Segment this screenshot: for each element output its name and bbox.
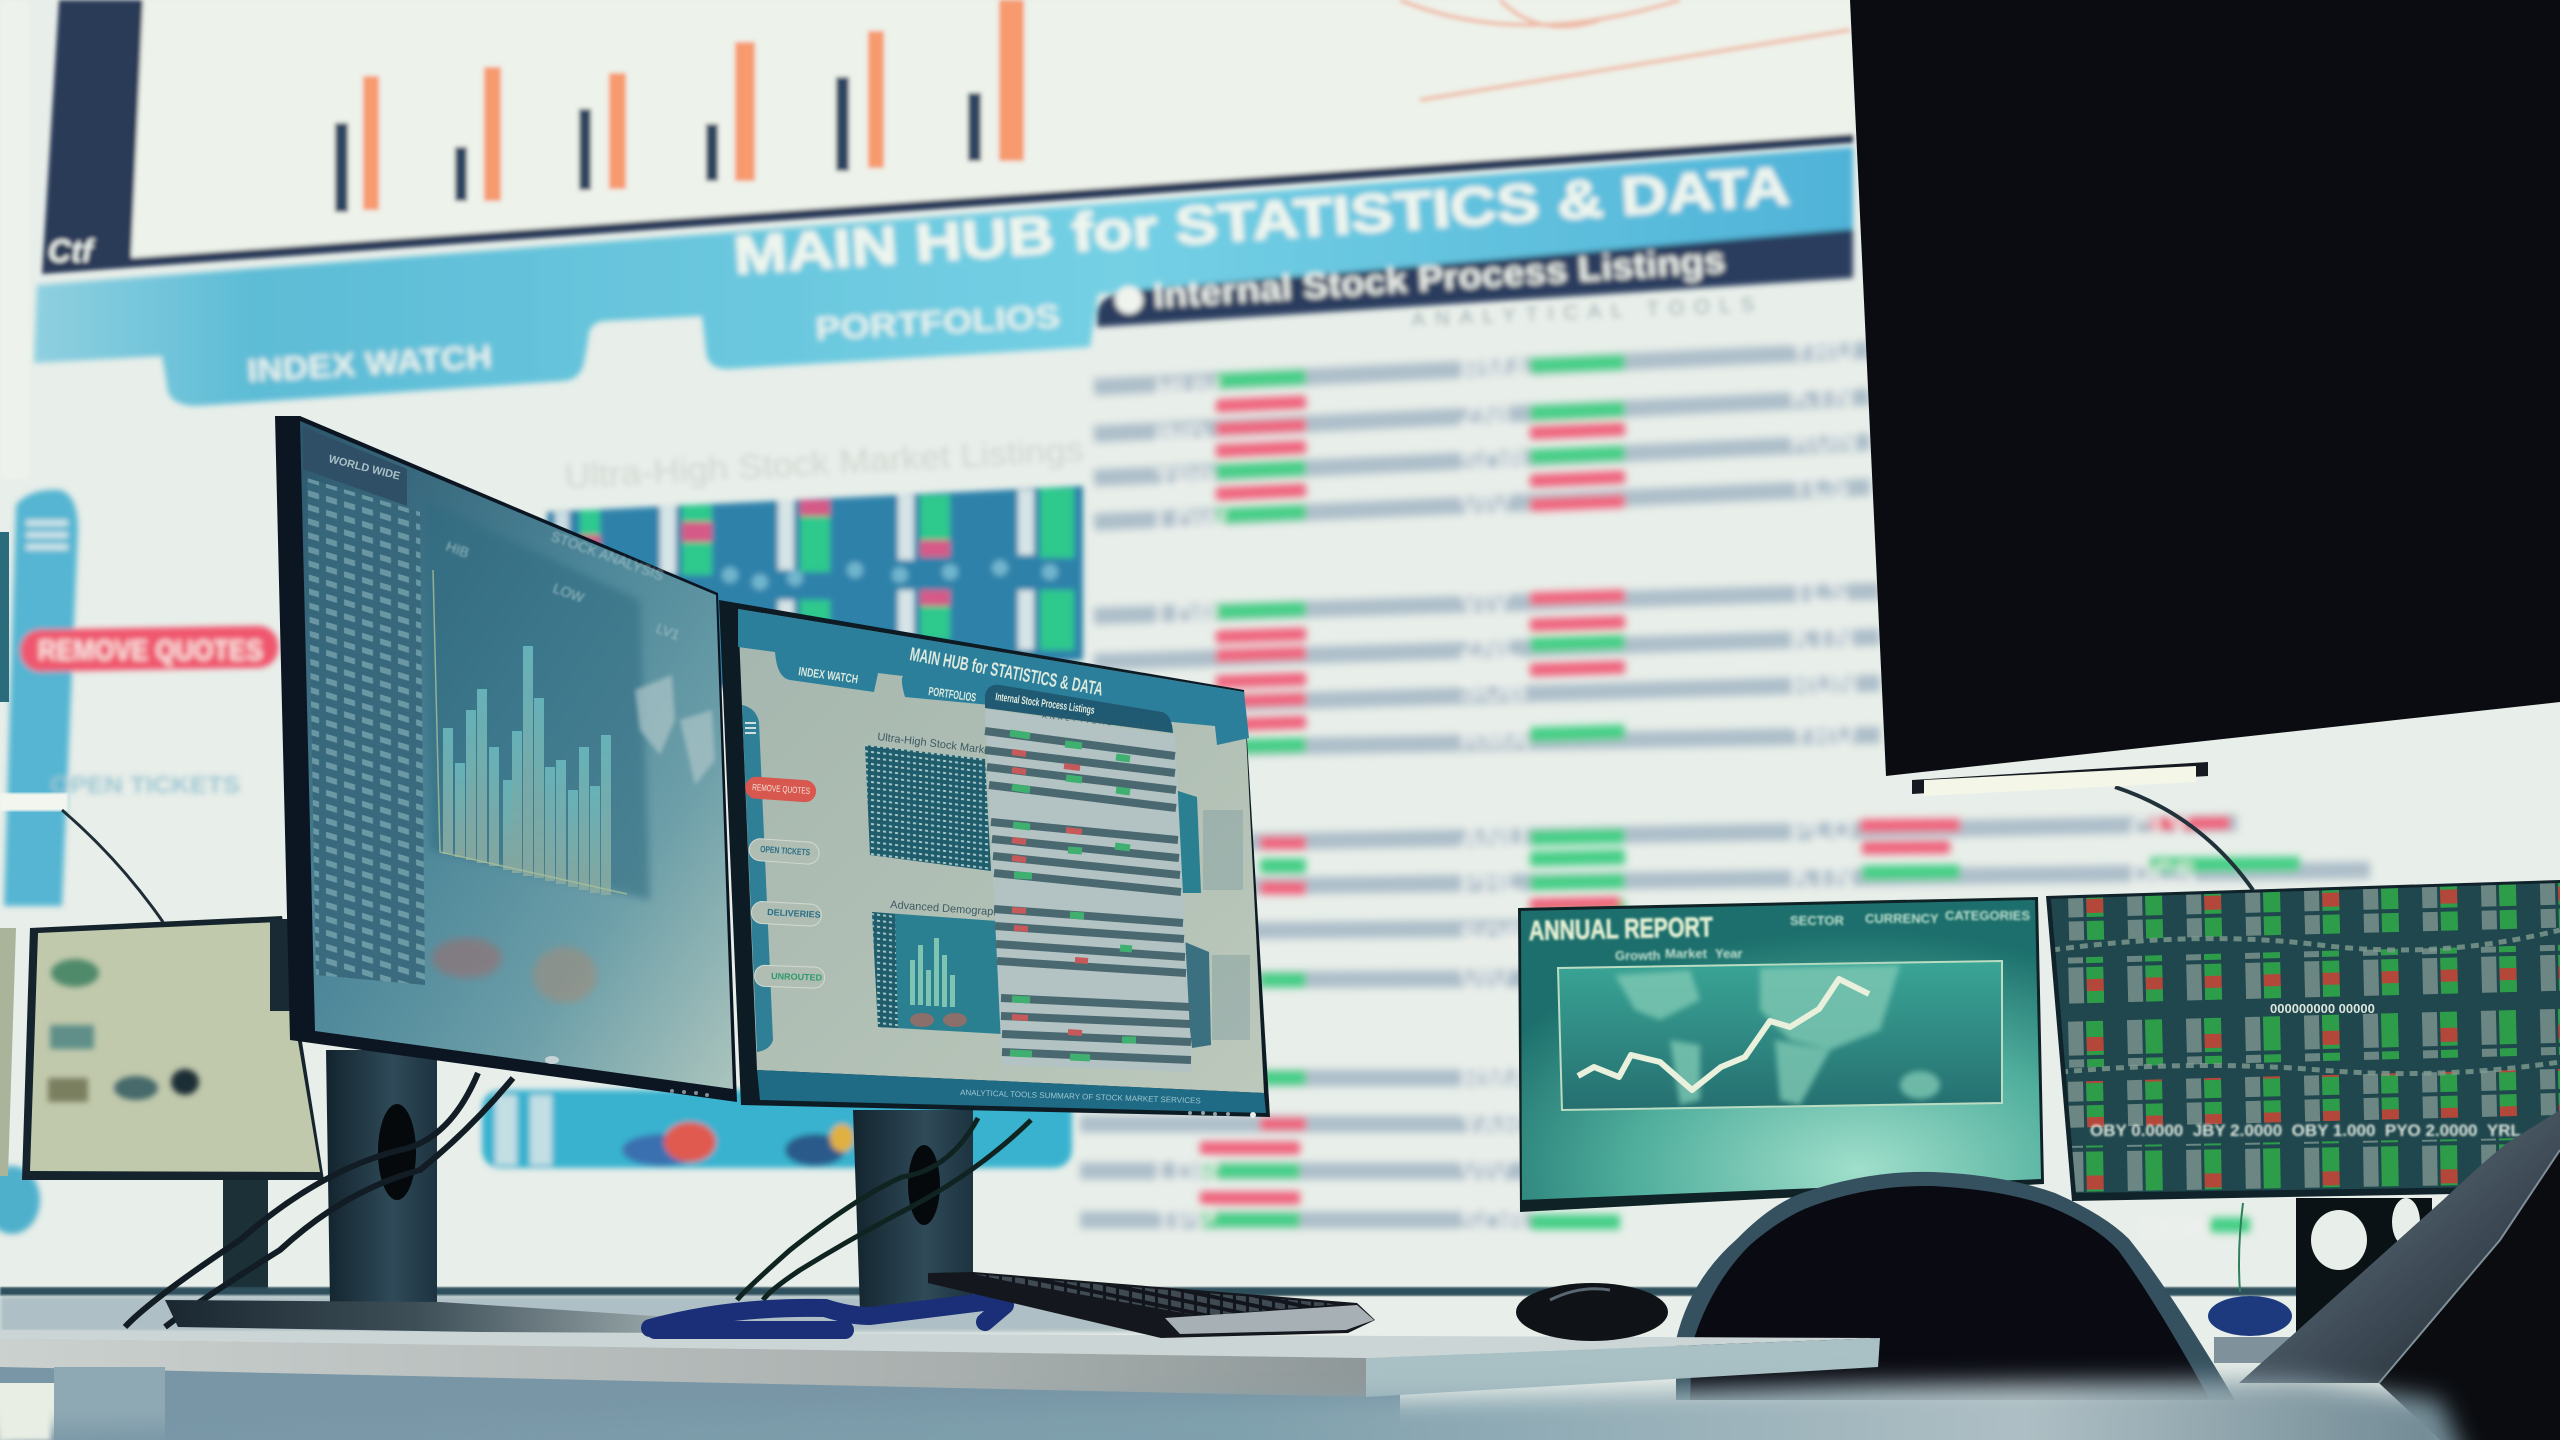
stock grid monitor — [2040, 875, 2560, 1205]
lower tint charts — [432, 938, 597, 1003]
desk leg — [54, 1367, 165, 1440]
analytical tools caption: ANALYTICAL TOOLS — [1411, 294, 1765, 331]
data tabs: HIB — [444, 538, 471, 561]
table header — [303, 427, 407, 506]
ticker labels: LDR — [1155, 598, 1219, 633]
cable bundle — [2208, 1203, 2292, 1336]
demographic caption: Advanced Demographic Info — [890, 899, 1029, 921]
left edge strip — [0, 0, 30, 480]
ticker labels: VIV — [1460, 964, 1510, 999]
arm light edge — [2379, 1150, 2560, 1383]
far edge monitor — [0, 928, 16, 1176]
cables — [125, 1073, 513, 1327]
left edge dark monitor sliver — [0, 532, 9, 702]
header band — [738, 609, 1249, 745]
ticker labels: TPP — [1155, 1202, 1215, 1237]
open tickets label: OPEN TICKETS — [50, 772, 240, 799]
index watch tab label: INDEX WATCH — [798, 664, 859, 686]
heatmap base — [547, 486, 1083, 700]
grey table rows — [1080, 350, 2370, 1220]
large black monitor foreground — [1850, 0, 2560, 796]
lower analytics panel — [482, 1090, 1072, 1168]
repeat white block bottom left — [0, 1395, 50, 1440]
chart frame — [1558, 961, 2002, 1110]
world map — [1615, 965, 1940, 1105]
ticker labels: RMA — [1460, 1060, 1531, 1095]
chair inner — [1690, 1186, 2210, 1400]
ticker labels: ZNL — [1460, 398, 1520, 433]
annual report monitor — [1518, 897, 2044, 1212]
ticker labels: IND — [1155, 418, 1208, 453]
data tabs: LV1 — [654, 620, 682, 643]
lower left pill — [0, 1166, 40, 1234]
ticker labels — [1155, 332, 2208, 1245]
red cells — [1200, 402, 2230, 1198]
chart axis — [433, 570, 627, 894]
stand base — [165, 1300, 670, 1335]
world map fragment — [635, 675, 715, 785]
listing red cells — [1012, 752, 1088, 1033]
ticker labels: RMA — [1460, 352, 1531, 387]
right main monitor — [719, 600, 1270, 1118]
chair shell — [1676, 1172, 2235, 1400]
title: ANNUAL REPORT — [1528, 911, 1713, 946]
remove quotes label: REMOVE QUOTES — [38, 635, 263, 667]
monitor screen — [30, 922, 320, 1172]
menu icon — [745, 722, 756, 734]
deliveries button — [751, 901, 822, 927]
top nav labels: SECTOR — [1790, 913, 1845, 928]
control buttons — [670, 1089, 709, 1097]
ticker labels: TLS — [1790, 574, 1849, 609]
wall screen: chart area — [42, 0, 1853, 274]
open tickets button — [748, 838, 820, 865]
mouse highlight — [1550, 1289, 1610, 1300]
office chair back — [1676, 1172, 2235, 1400]
cables — [737, 1118, 1031, 1300]
ticker labels: VIV — [1460, 488, 1510, 523]
keyboard body — [928, 1272, 1375, 1338]
ticker labels: RMA — [1460, 720, 1531, 755]
lower analytics text columns — [495, 1095, 552, 1165]
trend line — [1578, 979, 1869, 1090]
demographic number column — [872, 912, 898, 1028]
screen chart blobs — [48, 959, 199, 1102]
side bracket — [270, 919, 290, 1011]
ticker labels: SOB — [1460, 672, 1527, 707]
chart dark area — [425, 500, 650, 900]
top nav labels — [1615, 908, 2030, 963]
open tickets button: OPEN TICKETS — [760, 844, 810, 857]
desk surface — [0, 1330, 1880, 1358]
listing green cells — [1010, 733, 1136, 1058]
ticker strip: middle: 000000000 00000 — [2270, 1001, 2375, 1016]
webcam mark — [545, 1056, 559, 1064]
keys — [973, 1274, 1340, 1316]
chart panel background — [131, 0, 1853, 262]
listings dot — [1115, 286, 1143, 314]
remove quotes button — [744, 776, 817, 803]
ticker labels: KTN — [1790, 378, 1854, 413]
dark rear mass — [2379, 1150, 2560, 1440]
ultra-high caption: Ultra-High Stock Market Listings — [877, 731, 1035, 762]
banner title: MAIN HUB for STATISTICS & DATA — [732, 156, 1791, 286]
top nav labels: Market — [1665, 946, 1708, 961]
table column — [307, 478, 425, 985]
wave separators — [2052, 930, 2560, 1074]
listings card title: Internal Stock Process Listings — [995, 691, 1095, 717]
ticker labels: HUV — [1155, 371, 1221, 406]
data tabs — [444, 528, 682, 643]
heatmap node trail — [722, 560, 1058, 590]
wall panel: stock heatmap — [482, 431, 1085, 1168]
back shelf — [0, 1287, 2560, 1296]
ticker labels: YRU — [1790, 716, 1855, 751]
stand column — [326, 1050, 437, 1304]
heatmap columns — [555, 488, 1074, 650]
ticker labels: SOB — [1460, 918, 1527, 953]
screen — [1521, 900, 2041, 1200]
demographic bars — [910, 938, 955, 1007]
bezel — [719, 600, 1270, 1117]
silver front edge — [1165, 1305, 1374, 1334]
top nav labels: CATEGORIES — [1945, 908, 2030, 923]
ticker strip: lower: OBY 0.0000 JBY 2.0000 OBY 1.000 PYO 2.0000 YRL — [2090, 1121, 2521, 1140]
blue banner shape — [34, 147, 1853, 406]
monitor bezel — [22, 916, 324, 1180]
under desk fill — [0, 1360, 1400, 1440]
green cells — [1200, 362, 2300, 1225]
ultra-high panel — [865, 745, 991, 871]
arm band — [2239, 1110, 2560, 1383]
ticker labels: ANU — [1460, 820, 1527, 855]
data tabs: STOCK ANALYSIS — [549, 528, 666, 583]
bezel — [275, 416, 737, 1102]
desk left face — [0, 1338, 1366, 1397]
back desk band — [0, 1296, 1200, 1332]
ticker labels: YAR — [1460, 1106, 1523, 1141]
demographic panel — [872, 912, 1002, 1034]
curve traces top right — [1400, 0, 1850, 100]
cable hole — [908, 1145, 940, 1225]
ticker labels: YRU — [1790, 332, 1855, 367]
listings header — [1097, 229, 1853, 327]
back desk right — [2214, 1337, 2560, 1363]
bezel — [1518, 897, 2044, 1212]
right side panel upper — [1175, 790, 1201, 893]
lamp bar — [0, 793, 68, 811]
deliveries button: DELIVERIES — [767, 907, 821, 920]
ticker labels: CLY — [2130, 810, 2189, 845]
ticker labels: SOB — [1460, 1204, 1527, 1239]
ticker labels: PLO — [1790, 812, 1854, 847]
blurred foreground desk — [0, 1380, 2470, 1440]
logo mark: Ctf — [48, 233, 96, 269]
wall banner — [34, 147, 1853, 406]
ticker labels: RUN — [1790, 666, 1857, 701]
ticker labels: LDW — [1155, 504, 1226, 539]
right side panel lower — [1180, 940, 1211, 1048]
navy side band — [42, 0, 1853, 274]
footer caption: ANALYTICAL TOOLS SUMMARY OF STOCK MARKET SERVICES — [960, 1088, 1201, 1105]
lamp fixture — [1912, 762, 2208, 794]
monitor stand — [223, 1180, 268, 1292]
sidebar — [742, 705, 773, 1052]
heatmap caption: Ultra-High Stock Market Listings — [563, 431, 1085, 496]
menu icon — [26, 520, 68, 550]
mouse body — [1516, 1283, 1668, 1341]
wall listings table — [1080, 332, 2370, 1245]
ticker labels: ZNL — [1460, 630, 1520, 665]
footer band — [757, 1070, 1266, 1113]
ticker labels: KTN — [1790, 620, 1854, 655]
tab: portfolios: PORTFOLIOS — [814, 297, 1061, 347]
listings heading: Internal Stock Process Listings — [1152, 239, 1726, 316]
stand column — [853, 1110, 973, 1310]
ticker labels: SEW — [2137, 1210, 2208, 1245]
computer mouse — [1516, 1283, 1668, 1341]
ticker labels: LDR — [1155, 1154, 1219, 1189]
lower analytics pie one — [622, 1122, 716, 1166]
stock screen cells — [2040, 875, 2560, 1205]
top nav labels: CURRENCY — [1865, 911, 1939, 926]
monitor body — [1850, 0, 2560, 776]
left main monitor — [270, 416, 737, 1102]
left desk lamp — [0, 793, 163, 922]
keyboard — [928, 1272, 1375, 1338]
screen — [300, 421, 733, 1089]
lanyard — [650, 1300, 1005, 1330]
screen title: MAIN HUB for STATISTICS & DATA — [908, 644, 1105, 701]
ticker labels: TPP — [1155, 462, 1215, 497]
back monitor cable — [2115, 787, 2253, 890]
screen body — [738, 609, 1264, 1093]
stand column — [2296, 1198, 2432, 1335]
white block below — [0, 1383, 54, 1440]
desk right face — [1366, 1338, 1880, 1397]
lower analytics pie two — [785, 1124, 854, 1166]
lamp cable — [62, 810, 163, 922]
ticker labels: VIV — [1460, 584, 1510, 619]
bezel — [2046, 880, 2560, 1201]
ticker labels: PHL — [1460, 864, 1522, 899]
small left monitor — [0, 916, 324, 1292]
ticker labels: KTN — [1790, 858, 1854, 893]
right chair arm — [2239, 1110, 2560, 1440]
right side notes — [1203, 810, 1250, 1040]
cable hole — [378, 1104, 416, 1200]
right main monitor stand — [737, 1110, 1031, 1310]
remove quotes button: REMOVE QUOTES — [752, 782, 810, 796]
listing rows — [985, 731, 1191, 1060]
ticker labels: TLS — [1790, 468, 1849, 503]
unrouted button: UNROUTED — [771, 971, 823, 983]
listings card — [985, 709, 1192, 1072]
left main monitor stand — [125, 1050, 670, 1335]
listings card header — [985, 685, 1173, 733]
top nav labels: Year — [1715, 946, 1742, 961]
ticker labels: VIV — [1460, 1154, 1510, 1189]
lamp light — [1924, 766, 2196, 796]
portfolios tab label: PORTFOLIOS — [928, 684, 977, 705]
ticker labels: SOB — [1460, 444, 1527, 479]
unrouted button — [754, 965, 825, 988]
remove quotes button — [20, 625, 279, 672]
table heading: WORLD WIDE — [327, 453, 401, 483]
sidebar pill — [4, 490, 78, 906]
top nav labels: Growth — [1615, 948, 1661, 963]
data tabs: LOW — [551, 580, 587, 606]
bottom button dots — [1188, 1111, 1256, 1118]
demographic pies — [910, 1013, 967, 1027]
left sidebar on wall — [0, 490, 279, 1234]
bar chart — [443, 646, 611, 895]
stock monitor stand — [2208, 1198, 2432, 1336]
ticker labels: RUN — [1790, 422, 1857, 457]
desk — [0, 1330, 2560, 1440]
analytical tools caption: ANALYTICAL TOOLS — [1042, 713, 1157, 732]
paired bar chart — [335, 0, 1024, 212]
ticker labels: DCS — [2130, 856, 2195, 891]
tab: index watch: INDEX WATCH — [246, 338, 493, 389]
